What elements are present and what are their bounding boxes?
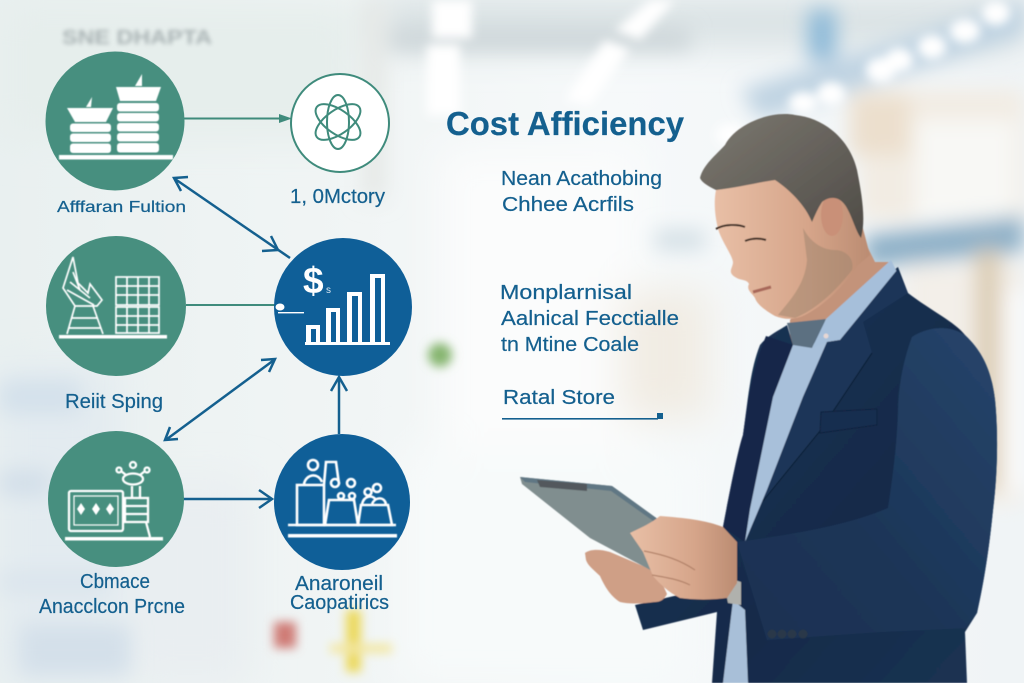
connector: teal line to chart [186,304,276,306]
text block: Nean Acathobing: Chhee Acrfils [502,194,634,216]
button [824,334,828,338]
node: chart [274,238,412,376]
icon: bars [276,274,390,345]
icon: small s: s [326,285,331,296]
text block: Ratal Store [502,387,663,420]
connector: double arrow middle [165,359,275,440]
hair [700,114,863,238]
label: Anaroneil Caopatirics: Anaroneil [295,573,383,595]
icon: stacks [59,74,173,160]
text block: Monplarnisal: Aalnical Fecctialle [501,308,679,330]
node: Anaroneil [274,434,410,570]
connector: teal arrow to atom [184,114,292,123]
shirt [745,342,827,542]
icon: boxes with people [288,460,397,538]
face [715,160,870,319]
label: Afffaran Fultion: Afffaran Fultion [57,199,186,216]
near hand [630,516,737,600]
person: man with tablet [520,114,997,683]
tablet [520,477,677,573]
label: Reiit Sping: Reiit Sping [65,391,163,413]
icon: monitor and robot [65,462,163,540]
node: Cbmace [48,431,184,567]
stubble [778,228,853,318]
icon: crane and grid [59,257,167,338]
label: 1, 0Mctory: 1, 0Mctory [290,186,385,208]
finger lines [644,551,695,585]
far lapel [723,336,793,542]
title: Cost Afficiency [446,105,685,142]
node: Reiit Sping [46,236,186,376]
label: Cbmace Anacclcon Prcne [39,571,185,618]
jacket silhouette [635,267,997,683]
connector: horizontal arrow [183,490,272,508]
text block: Monplarnisal [500,282,679,356]
text block: Ratal Store: Ratal Store [503,387,615,409]
node: atom [291,74,389,172]
icon: atom [310,95,366,149]
sleeve [737,328,997,640]
blurred background sign: SNE DHAPTA [62,27,212,49]
label: Anaroneil Caopatirics [290,573,389,614]
lapel [745,270,908,542]
connector: vertical arrow [331,377,347,434]
label: Cbmace Anacclcon Prcne: Cbmace [80,571,150,593]
pocket [820,409,877,433]
connector: double arrow top [174,177,290,258]
watch [727,580,741,605]
icon: dollar: $ [303,260,324,301]
label: Anaroneil Caopatirics: Caopatirics [290,592,389,614]
shirt lower strip [723,600,748,683]
eye, brow and mouth [716,225,771,292]
far hand [585,550,667,604]
text block: Monplarnisal: tn Mtine Coale [501,334,639,356]
lapel edge [763,353,872,501]
text block: Monplarnisal: Monplarnisal [500,282,632,304]
text block: Nean Acathobing [501,168,662,216]
node: Affraran Fultion [46,52,184,190]
label: Cbmace Anacclcon Prcne: Anacclcon Prcne [39,596,185,618]
ear [821,194,843,236]
collar [787,319,826,348]
sleeve buttons [768,630,808,638]
neck [790,232,895,345]
text block: Nean Acathobing: Nean Acathobing [501,168,662,190]
